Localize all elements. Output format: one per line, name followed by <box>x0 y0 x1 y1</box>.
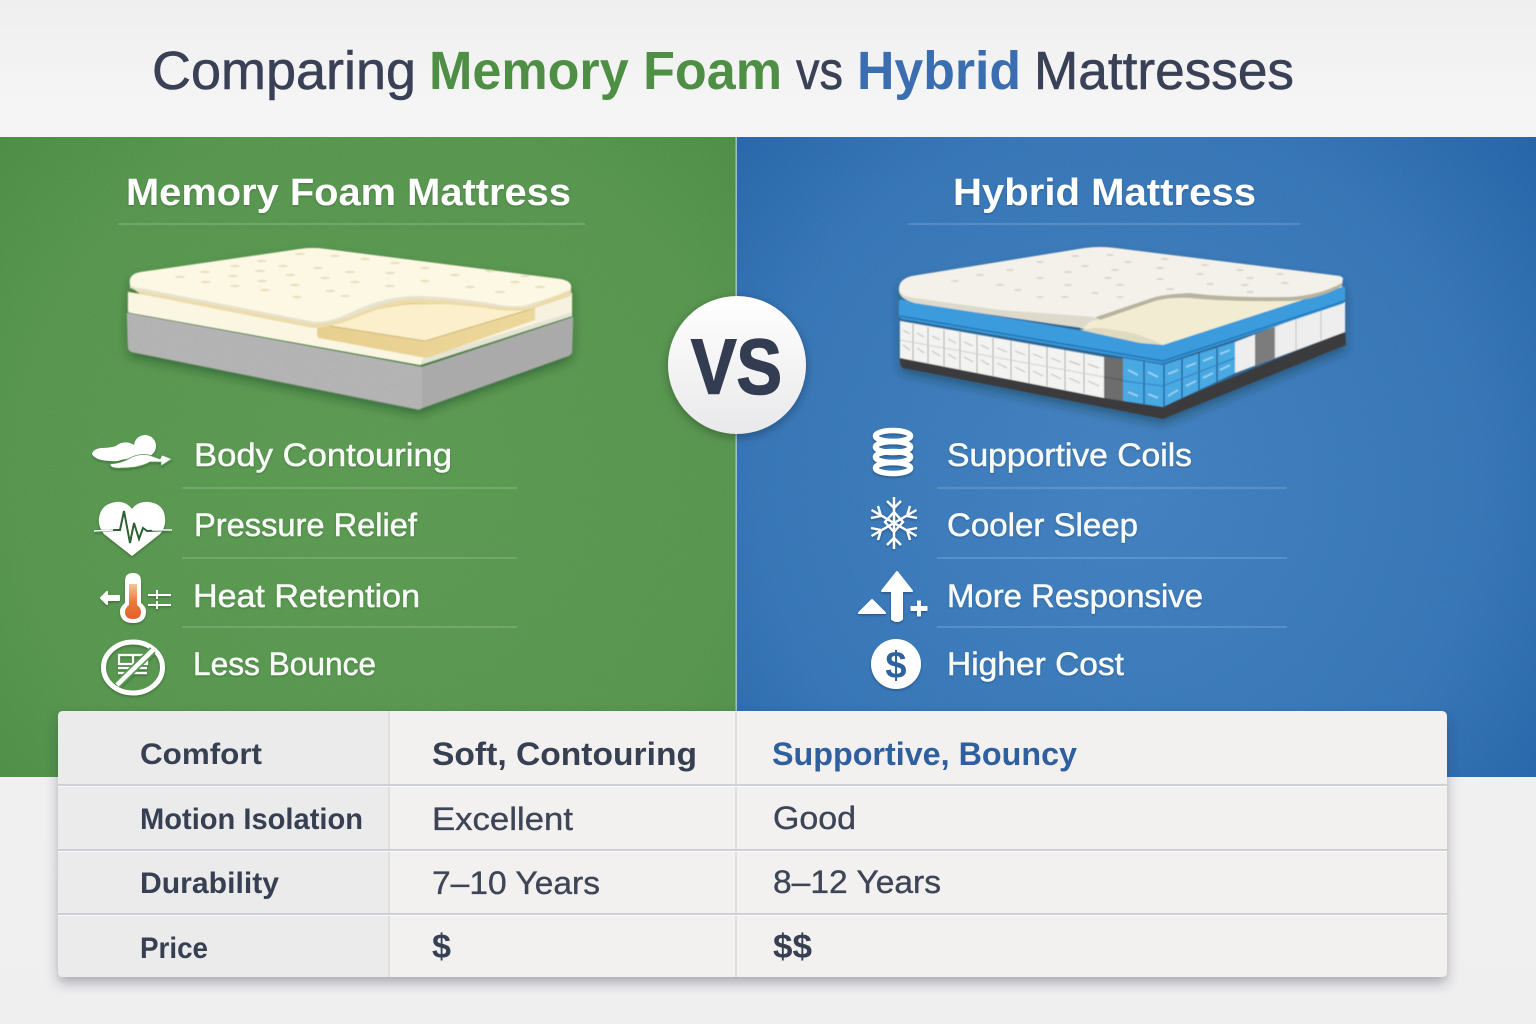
illustration: memory foam mattress <box>127 248 573 409</box>
row: motion isolation <box>140 800 856 837</box>
row: price <box>140 928 812 966</box>
coils white right <box>1235 300 1345 373</box>
comparison table <box>58 711 1447 977</box>
top layer <box>899 247 1343 327</box>
base <box>900 331 1346 419</box>
coils left <box>900 321 1104 398</box>
feature: body contouring <box>92 435 452 473</box>
coils blue <box>1123 342 1235 407</box>
row: durability: 8–12 Years <box>773 864 941 900</box>
blue band <box>899 286 1345 363</box>
title: Mattresses <box>1034 41 1294 101</box>
row: durability <box>140 864 941 901</box>
row: comfort: Supportive, Bouncy <box>772 736 1077 772</box>
row: comfort <box>140 736 1077 772</box>
feature: supportive coils <box>876 430 1192 474</box>
feature: more responsive <box>859 572 1203 621</box>
row: price: $ <box>432 928 451 966</box>
feature: heat retention <box>101 573 420 623</box>
row: durability: 7–10 Years <box>432 865 600 901</box>
row: price: $$ <box>773 928 812 966</box>
row: durability: Durability <box>140 867 279 900</box>
row: motion isolation: Good <box>773 800 856 836</box>
feature: pressure relief: Pressure Relief <box>194 507 417 543</box>
feature: supportive coils: Supportive Coils <box>947 437 1192 473</box>
title: Memory Foam <box>429 41 782 101</box>
row: price: Price <box>140 932 208 965</box>
panel: hybrid <box>736 137 1536 777</box>
title: Comparing <box>152 41 416 101</box>
tufts <box>175 253 545 298</box>
title: Hybrid <box>857 41 1021 101</box>
vs badge: VS <box>691 322 782 410</box>
icon: thermometer <box>101 573 171 623</box>
feature: body contouring: Body Contouring <box>194 437 452 473</box>
icon: no bounce <box>104 642 162 693</box>
icon: heart with pulse <box>94 502 172 556</box>
feature: higher cost: Higher Cost <box>947 646 1124 682</box>
row: motion isolation: Excellent <box>432 801 573 837</box>
icon: snowflake <box>871 497 917 549</box>
icon: up arrow <box>859 572 927 621</box>
feature: heat retention: Heat Retention <box>193 578 420 614</box>
row: motion isolation: Motion Isolation <box>140 803 363 836</box>
feature: more responsive: More Responsive <box>947 578 1203 614</box>
icon: dollar: $ <box>885 645 907 687</box>
feature: cooler sleep <box>871 497 1138 549</box>
vs badge <box>668 296 806 434</box>
icon: body contouring <box>92 435 172 468</box>
tan stripe under top sheet <box>130 284 571 328</box>
title <box>152 41 1294 101</box>
tufts <box>951 254 1289 298</box>
icon: dollar <box>871 639 921 689</box>
panel: memory foam <box>0 137 736 777</box>
cream foam <box>1080 283 1342 345</box>
feature: less bounce: Less Bounce <box>193 646 376 682</box>
title: vs <box>796 41 843 101</box>
row: comfort: Soft, Contouring <box>432 736 697 772</box>
feature: cooler sleep: Cooler Sleep <box>947 507 1138 543</box>
illustration: hybrid mattress <box>899 247 1346 419</box>
feature: higher cost <box>871 639 1124 689</box>
feature: less bounce <box>104 642 376 693</box>
heading: memory foam mattress: Memory Foam Mattress <box>126 172 571 214</box>
feature: pressure relief <box>94 502 417 556</box>
heading: hybrid mattress: Hybrid Mattress <box>953 172 1256 214</box>
row: comfort: Comfort <box>140 738 262 771</box>
icon: coils <box>876 430 910 474</box>
